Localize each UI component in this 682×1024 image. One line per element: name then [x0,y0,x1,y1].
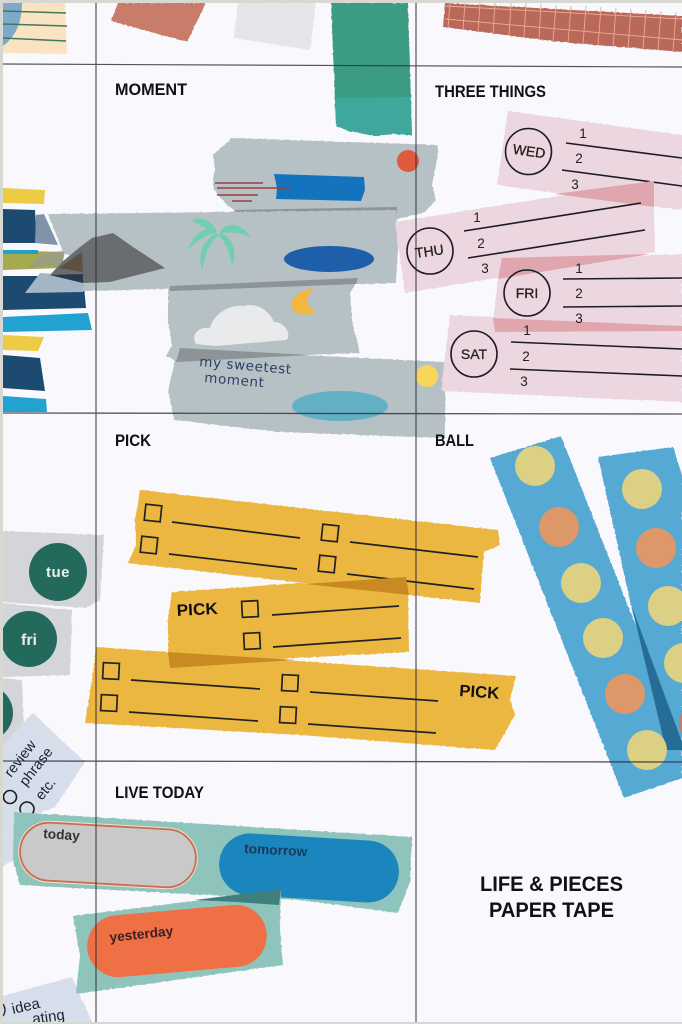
top red tape [111,3,206,42]
idea tape [3,977,93,1024]
fri tape: 1 [575,261,583,276]
sat tape: 3 [575,311,583,326]
sat tape: 1 [523,323,531,338]
top brick grid tape [443,3,682,52]
left day tapes [0,531,104,1024]
review phrase etc tape [2,713,85,866]
review phrase etc tape: review [2,737,40,780]
tape strip 4: moment [204,370,265,391]
yellow tape 3 [85,647,516,750]
thu tape: 3 [481,261,489,276]
top left cream striped tape [3,3,67,54]
top pale grey tape [234,3,316,50]
fri tape [1,603,72,677]
top green tape [331,3,412,136]
tue tape: tue [46,564,70,581]
panel: ball blue dotted tapes [490,436,682,798]
fri tape: FRI [516,285,538,301]
heading: ball: BALL [435,432,474,450]
fri tape: 2 [575,286,583,301]
yesterday tape [73,889,283,994]
heading: pick: PICK [115,432,151,450]
yellow tape 2: PICK [176,600,218,620]
tape strip 2 with island [48,210,398,291]
sat tape: 3 [520,374,528,389]
heading: moment: MOMENT [115,81,187,99]
review phrase etc tape: phrase [17,745,56,789]
today tomorrow tape [13,812,412,913]
wed tape [497,111,682,210]
panel: three things pink tapes [395,111,682,402]
today tomorrow tape: today [43,826,81,844]
panel: moment grey tapes [48,138,445,438]
sat tape: 2 [522,349,530,364]
wed tape: 3 [571,177,579,192]
tape strip 4 [168,348,445,438]
blue tape left [490,436,682,798]
left stacked navy, yellow and cyan stripes [3,188,92,412]
yellow tape 1 [128,490,500,603]
blue tape right [598,447,682,770]
title: life and pieces paper tape: LIFE & PIECES [480,873,623,896]
sat tape [441,311,682,402]
thu tape: 1 [473,210,481,225]
fri tape: fri [21,632,37,649]
yesterday tape: yesterday [109,923,174,945]
title: life and pieces paper tape: PAPER TAPE [489,899,614,922]
tape strip 1 [213,138,438,219]
heading: three things: THREE THINGS [435,83,546,101]
panel: pick yellow tapes [85,490,516,750]
yellow tape 2 [168,577,409,665]
thu tape: THU [414,241,445,261]
thu tape [395,181,655,293]
tape strip 3 [166,278,360,362]
wed tape: 1 [579,126,587,141]
wed tape: WED [512,141,546,161]
idea tape: idea [10,995,42,1018]
third partial tape [0,678,24,752]
wed tape: 2 [575,151,583,166]
title: life and pieces paper tape [480,873,623,922]
panel: live today teal tapes [13,812,412,994]
tape strip 4: my sweetest [199,354,292,378]
thu tape: 2 [477,236,485,251]
heading: live today: LIVE TODAY [115,784,204,802]
tue tape [3,531,104,608]
today tomorrow tape: tomorrow [244,841,308,859]
yellow tape 3: PICK [459,682,500,703]
fri tape [493,254,682,332]
review phrase etc tape: etc. [33,775,60,803]
sat tape: SAT [461,346,488,362]
